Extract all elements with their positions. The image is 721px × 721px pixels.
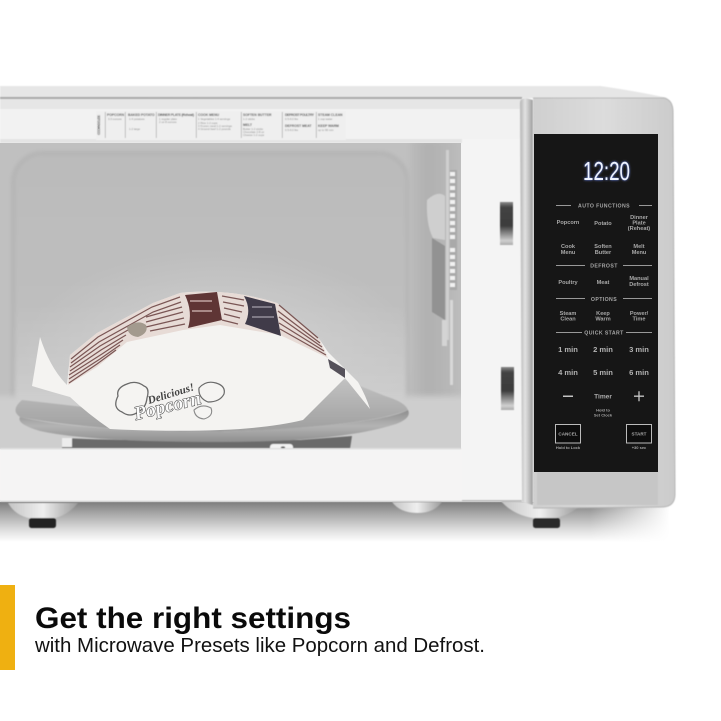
quick start buttons: 5 min	[593, 368, 613, 377]
black control panel	[534, 134, 658, 472]
start button: +30 sec	[632, 445, 647, 450]
option buttons: Keep	[596, 311, 610, 317]
maroon print block	[185, 292, 222, 328]
turntable glass plate	[15, 378, 409, 451]
printed stripe band	[68, 292, 328, 385]
cooking guide label strip: POPCORN	[107, 113, 125, 117]
cooking guide label strip: 3 Frozen meal 1-2 servings	[198, 124, 232, 128]
auto function buttons: Melt	[633, 244, 645, 250]
popcorn logo: Popcorn	[131, 388, 203, 425]
vent holes	[450, 172, 455, 287]
defrost buttons: Poultry	[558, 280, 579, 286]
option buttons: Clean	[560, 316, 576, 322]
auto function buttons: Popcorn	[557, 220, 580, 226]
quick start buttons: 1 min	[558, 345, 578, 354]
floor shadow under the microwave	[0, 500, 689, 544]
defrost heading	[556, 264, 652, 270]
minus, timer and plus buttons: Hold to	[596, 408, 610, 412]
auto function buttons	[557, 215, 650, 256]
caption heading: Get the right settings	[35, 602, 351, 635]
cooking guide label strip: KEEP WARM	[318, 124, 339, 128]
popcorn logo: Delicious!	[145, 381, 196, 407]
cavity side wall	[410, 140, 470, 460]
popcorn logo	[116, 381, 224, 425]
option buttons	[560, 311, 649, 322]
door lower sill and right edge trim	[0, 98, 533, 505]
cooking guide label strip: Cheese 1-2 cups	[243, 133, 265, 137]
cooking guide label strip: STEAM CLEAN	[318, 113, 343, 117]
minus, timer and plus buttons: Timer	[594, 394, 612, 400]
cooking guide label strip: BAKED POTATO	[128, 113, 155, 117]
option buttons: Steam	[560, 311, 576, 317]
cancel button	[556, 424, 581, 450]
defrost buttons	[558, 276, 649, 288]
auto function buttons: Potato	[594, 221, 612, 227]
microwave top surface	[0, 86, 668, 99]
minus, timer and plus buttons	[556, 387, 651, 418]
cooking guide label strip: Chocolate 2-8 oz	[243, 130, 265, 134]
auto function buttons: Plate	[632, 220, 646, 226]
minus, timer and plus buttons: Set Clock	[594, 412, 613, 418]
door frame	[0, 97, 522, 502]
auto function buttons: (Reheat)	[628, 226, 650, 232]
defrost buttons: Defrost	[629, 282, 649, 288]
quick start buttons: 3 min	[629, 345, 649, 354]
cancel button: Hold to Lock	[556, 445, 581, 450]
auto functions heading: AUTO FUNCTIONS	[578, 204, 630, 210]
quick start buttons: 4 min	[558, 368, 578, 377]
caption subtext: with Microwave Presets like Popcorn and Defrost.	[34, 635, 485, 657]
quick start heading	[556, 330, 652, 336]
cavity back wall	[13, 153, 408, 423]
door latches	[500, 202, 514, 410]
cooking guide label strip: 0.5-6.0 lbs	[285, 117, 299, 121]
cooking guide label strip: 1 Vegetables 1-4 servings	[198, 117, 231, 121]
option buttons: Warm	[595, 316, 611, 322]
quick start buttons: 2 min	[593, 345, 613, 354]
auto function buttons: Menu	[561, 250, 576, 256]
options heading: OPTIONS	[591, 297, 617, 303]
option buttons: Power/	[630, 311, 649, 317]
defrost heading: DEFROST	[590, 264, 618, 270]
button backgrounds	[555, 212, 652, 325]
cooking guide label strip: COOKING GUIDE	[97, 115, 101, 135]
cooking guide label strip: 1 cup water	[318, 117, 333, 121]
right stripes	[278, 305, 326, 355]
bag corner mark	[328, 359, 345, 378]
microwave feet	[8, 500, 580, 528]
quick start heading: QUICK START	[584, 330, 624, 336]
auto functions heading	[556, 204, 652, 210]
defrost buttons: Meat	[597, 280, 610, 286]
auto function buttons: Butter	[595, 250, 612, 256]
cooking guide label strip: 4 Ground beef 1-2 pounds	[198, 127, 231, 131]
left stripes	[69, 296, 244, 383]
oven cavity window	[0, 140, 470, 466]
small popcorn print	[127, 322, 147, 337]
quick start buttons	[558, 345, 649, 377]
cooking guide label strip: DEFROST POULTRY	[285, 113, 315, 117]
cooking guide label strip: DINNER PLATE (Reheat)	[158, 113, 194, 117]
auto function buttons: Cook	[561, 244, 576, 250]
cooking guide label strip: 3.0 ounces	[108, 117, 122, 121]
navy print block	[244, 296, 281, 336]
start button: START	[632, 432, 647, 436]
digital clock display: 12:20	[583, 156, 630, 186]
cavity right side details	[427, 150, 457, 385]
start button	[626, 424, 652, 450]
cooking guide label strip: SOFTEN BUTTER	[243, 113, 272, 117]
cooking guide label strip: 1-4 potatoes	[129, 117, 145, 121]
cooking guide label strip: COOK MENU	[198, 113, 220, 117]
cooking guide label strip	[96, 111, 346, 140]
popcorn bag	[32, 292, 370, 431]
auto function buttons: Soften	[594, 244, 612, 250]
yellow accent bar	[0, 585, 15, 670]
cooking guide label strip: DEFROST MEAT	[285, 124, 312, 128]
cancel button: CANCEL	[558, 432, 578, 436]
cooking guide label strip: 2 oz-8 ounces	[159, 120, 177, 124]
cooking guide label strip: 2 Rice 1-2 cups	[198, 121, 218, 125]
cavity floor	[0, 396, 470, 466]
cooking guide label strip: Butter 1-2 sticks	[243, 127, 264, 131]
defrost buttons: Manual	[629, 276, 649, 282]
auto function buttons: Menu	[632, 250, 647, 256]
cooking guide label strip: up to 99 min	[318, 128, 334, 132]
cooking guide label strip: 1 regular plate	[159, 117, 177, 121]
quick start buttons: 6 min	[629, 368, 649, 377]
cooking guide label strip: MELT	[243, 123, 253, 127]
auto function buttons: Dinner	[630, 215, 649, 221]
glow behind the bag	[20, 250, 420, 450]
cooking guide label strip: 1-2 large	[129, 127, 140, 131]
option buttons: Time	[633, 316, 645, 322]
cooking guide label strip: 1-2 sticks	[243, 117, 255, 121]
cooking guide label strip: 0.5-6.0 lbs	[285, 128, 299, 132]
options heading	[556, 297, 652, 303]
digital clock display: 12:20	[583, 156, 630, 186]
silver control panel body	[533, 98, 675, 508]
